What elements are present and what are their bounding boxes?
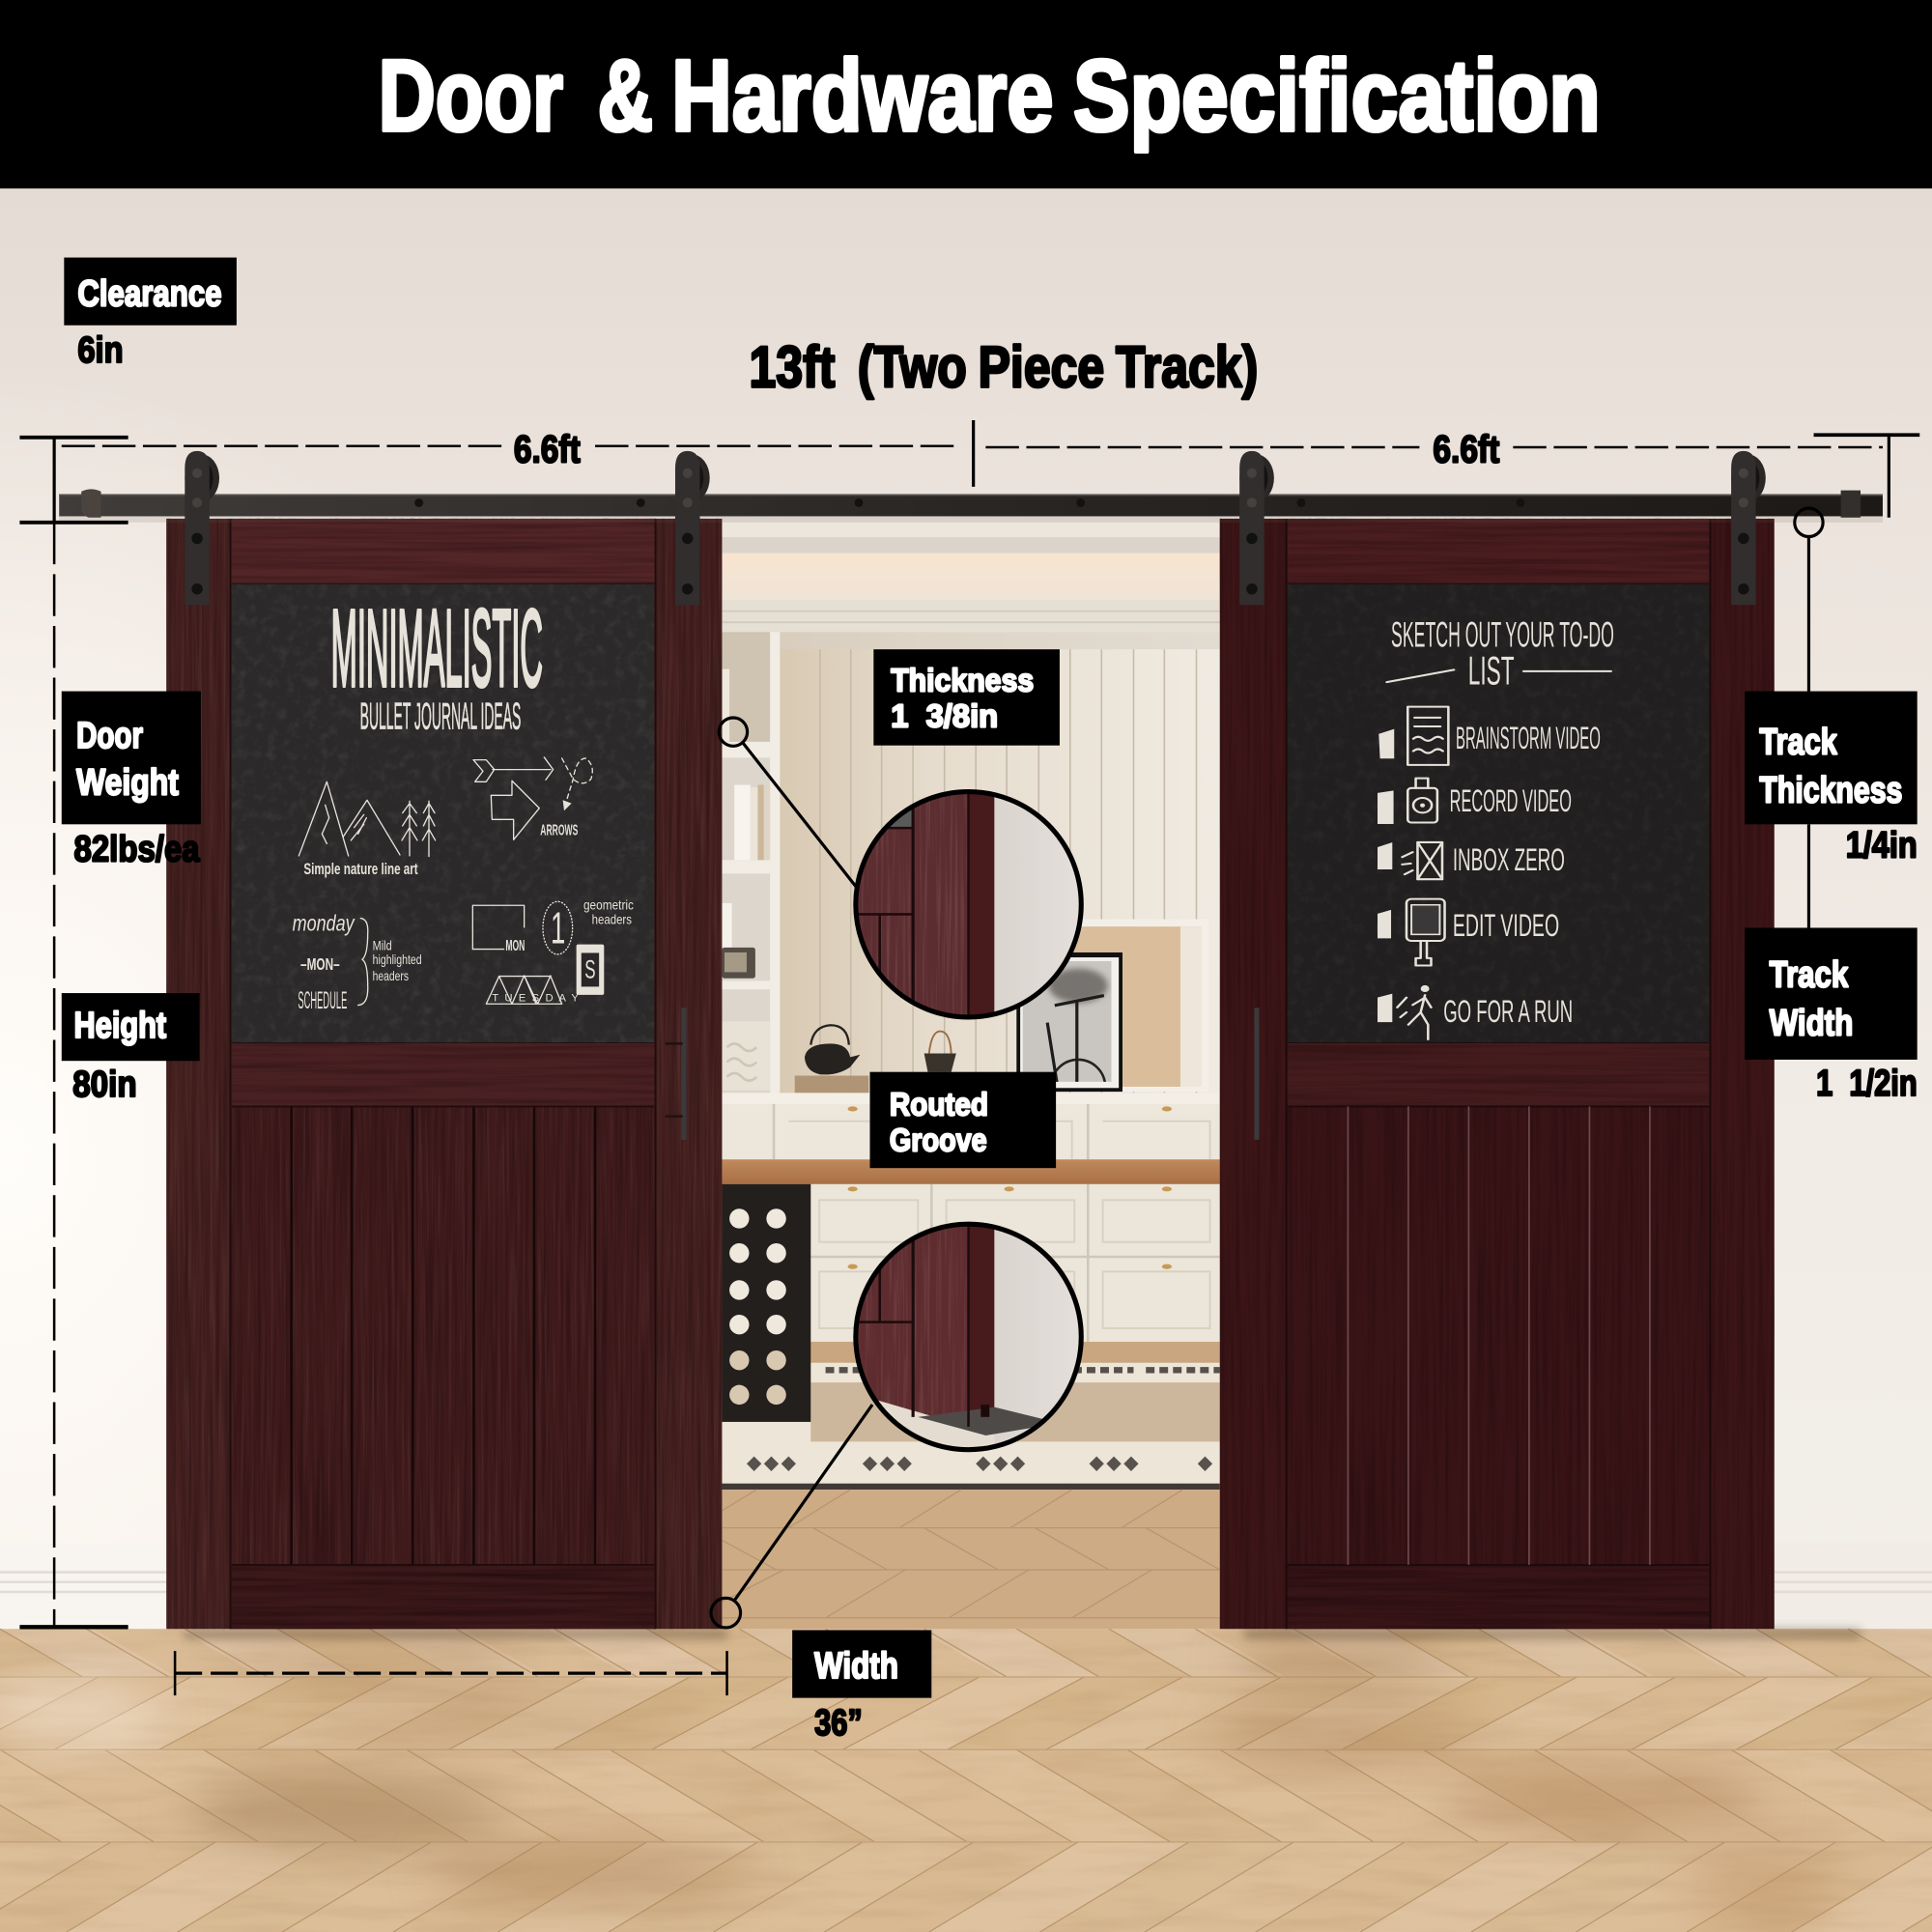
magnifier: door thickness detail bbox=[850, 788, 1096, 1023]
left bookshelf bbox=[722, 632, 780, 1093]
perforated black cube bbox=[722, 1184, 810, 1422]
dimension: door height bbox=[19, 523, 128, 1627]
chalkboard: minimalistic bullet journal: T U E S D A Y bbox=[492, 993, 579, 1005]
title text: & bbox=[598, 40, 653, 153]
chalkboard: minimalistic bullet journal: headers bbox=[373, 968, 409, 983]
label: track width: Track bbox=[1770, 954, 1849, 996]
chalkboard: minimalistic bullet journal: SCHEDULE bbox=[298, 987, 347, 1014]
title text: Door bbox=[379, 40, 563, 153]
label: clearance: 6in bbox=[77, 329, 124, 371]
title text bbox=[379, 40, 1601, 153]
label: track width: Width bbox=[1770, 1002, 1853, 1043]
teapots and tray bbox=[795, 1025, 956, 1093]
chalkboard: minimalistic bullet journal: –MON– bbox=[300, 954, 340, 974]
left barn door: MINIMALISTIC bbox=[331, 587, 543, 710]
title text: Specification bbox=[1073, 40, 1601, 153]
chalkboard: to-do list: RECORD VIDEO bbox=[1450, 783, 1572, 818]
label: height bbox=[62, 993, 200, 1105]
wall background bbox=[0, 188, 1932, 1630]
chalkboard: minimalistic bullet journal: BULLET JOURNAL IDEAS bbox=[360, 695, 521, 737]
label: door weight bbox=[62, 692, 201, 870]
right barn door bbox=[1220, 519, 1775, 1629]
chalkboard: to-do list: LIST bbox=[1468, 649, 1515, 694]
label: track thickness bbox=[1745, 692, 1918, 867]
chalkboard: minimalistic bullet journal: 1 bbox=[551, 903, 565, 953]
door thickness leader line bbox=[719, 718, 856, 887]
label: track width bbox=[1745, 927, 1918, 1104]
label: routed groove: Groove bbox=[890, 1122, 987, 1158]
sliding track rail bbox=[59, 489, 1883, 523]
label: door weight: 82lbs/ea bbox=[74, 829, 200, 870]
label: door thickness bbox=[873, 649, 1060, 746]
routed groove leader line bbox=[711, 1405, 872, 1628]
hanger straps and wheels bbox=[185, 451, 1766, 605]
chalkboard: minimalistic bullet journal: S bbox=[584, 955, 596, 984]
label: door thickness: 1 3/8in bbox=[891, 699, 998, 735]
chalkboard: minimalistic bullet journal: Simple nature line art bbox=[303, 860, 418, 878]
label: door thickness: Thickness bbox=[891, 664, 1034, 699]
chalkboard: minimalistic bullet journal bbox=[232, 584, 654, 1042]
label: width: Width bbox=[814, 1645, 898, 1687]
label: track thickness: 1/4in bbox=[1846, 825, 1918, 867]
floor and rug inside room bbox=[722, 1342, 1220, 1629]
baseboard bbox=[0, 1543, 1932, 1629]
title text: Hardware bbox=[671, 40, 1054, 153]
label: height: Height bbox=[74, 1005, 166, 1046]
chalkboard: minimalistic bullet journal: Mild bbox=[373, 937, 392, 952]
chalkboard: minimalistic bullet journal: headers bbox=[592, 912, 632, 927]
heading: 13ft two piece track: 13ft (Two Piece Track) bbox=[750, 335, 1258, 400]
chalkboard: to-do list: BRAINSTORM VIDEO bbox=[1456, 721, 1601, 755]
label: clearance: Clearance bbox=[77, 272, 222, 314]
label: right 6.6ft: 6.6ft bbox=[1433, 428, 1499, 470]
white cabinets and wood worktop bbox=[722, 1093, 1220, 1342]
chalkboard: minimalistic bullet journal: highlighted bbox=[373, 952, 422, 967]
dimension: 13ft track bracket lines bbox=[19, 420, 1919, 523]
chalkboard: to-do list bbox=[1288, 584, 1709, 1042]
chalkboard: minimalistic bullet journal: ARROWS bbox=[540, 822, 578, 838]
title banner bbox=[0, 0, 1932, 188]
track thickness leader line bbox=[1795, 508, 1823, 927]
dimension: door width bbox=[175, 1651, 727, 1695]
chalkboard: to-do list: INBOX ZERO bbox=[1453, 842, 1565, 877]
chalkboard: to-do list: EDIT VIDEO bbox=[1453, 908, 1559, 943]
interior room seen through opening bbox=[722, 519, 1220, 1629]
chalkboard: minimalistic bullet journal: geometric bbox=[583, 897, 634, 913]
label: routed groove: Routed bbox=[890, 1087, 988, 1122]
alcove panelled back wall bbox=[779, 632, 1220, 1093]
label: left 6.6ft: 6.6ft bbox=[514, 428, 581, 470]
right door pull handle bbox=[1254, 1008, 1260, 1140]
left barn door bbox=[166, 519, 722, 1629]
herringbone wood floor bbox=[0, 1629, 1932, 1932]
label: routed groove bbox=[870, 1072, 1056, 1168]
chalkboard: minimalistic bullet journal: monday bbox=[293, 910, 355, 935]
label: door weight: Door bbox=[76, 715, 143, 756]
framed art and bicycle photo bbox=[1016, 920, 1202, 1092]
label: track thickness: Track bbox=[1759, 722, 1837, 763]
label: width bbox=[792, 1631, 931, 1744]
label: clearance bbox=[64, 258, 237, 371]
magnifier: routed groove detail bbox=[850, 1220, 1096, 1454]
label: width: 36” bbox=[814, 1702, 863, 1744]
chalkboard: to-do list: GO FOR A RUN bbox=[1443, 994, 1573, 1029]
label: height: 80in bbox=[72, 1064, 137, 1105]
left door pull handle bbox=[666, 1008, 686, 1140]
door shadows on floor bbox=[185, 1629, 1861, 1638]
chalkboard: minimalistic bullet journal: MON bbox=[505, 938, 525, 954]
label: door weight: Weight bbox=[76, 762, 179, 804]
